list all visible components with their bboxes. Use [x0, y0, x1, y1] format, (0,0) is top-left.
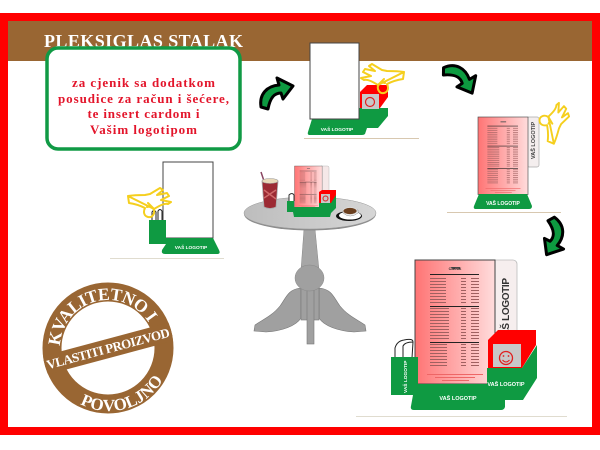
shelf line	[356, 416, 567, 417]
base label: VAŠ LOGOTIP	[486, 199, 521, 207]
box pocket label: VAŠ LOGOTIP	[487, 380, 525, 388]
icon: hand	[361, 64, 404, 93]
box face with smiley	[362, 94, 379, 109]
icon: hand	[128, 188, 171, 217]
coffee cup on saucer	[336, 208, 362, 221]
base label: VAŠ LOGOTIP	[321, 125, 354, 133]
green base	[474, 194, 532, 209]
icon: hand	[534, 99, 572, 146]
stand: step one, empty panel	[110, 162, 224, 259]
glass of cola	[261, 172, 278, 208]
logo card behind menu: VAŠ LOGOTIP	[529, 121, 537, 159]
stamp band: VLASTITI PROIZVOD	[45, 325, 171, 372]
napkin roll	[395, 339, 413, 358]
stamp text: bottom: POVOLJNO	[80, 376, 161, 412]
brown header band	[8, 21, 592, 61]
column ball	[295, 265, 324, 291]
menu heading: CJENIK	[449, 267, 462, 271]
stand: step two, card insert	[304, 43, 419, 139]
napkin outline	[152, 210, 162, 220]
green holder	[149, 220, 166, 244]
box face with smiley	[493, 344, 521, 367]
stand: final assembled product	[356, 260, 567, 417]
empty stand panel	[310, 43, 359, 119]
table column	[301, 229, 319, 270]
callout: description box: Vašim logotipom	[90, 122, 197, 137]
empty stand panel	[163, 162, 213, 238]
title: PLEKSIGLAS STALAK	[44, 31, 243, 51]
shelf line	[304, 138, 419, 139]
callout: description box: za cjenik sa dodatkom	[72, 75, 215, 90]
miniature stand	[287, 166, 336, 217]
base label: VAŠ LOGOTIP	[439, 394, 477, 402]
table with drinks and stand	[244, 166, 376, 344]
callout: description box: posudice za račun i šećere,	[58, 91, 229, 106]
menu sheet	[478, 117, 528, 194]
shelf line	[110, 258, 224, 259]
arrow: step two to three	[442, 60, 480, 99]
logo card: VAŠ LOGOTIP	[499, 278, 512, 342]
napkin holder	[391, 357, 418, 395]
table top	[244, 197, 376, 230]
red card box	[488, 330, 536, 368]
shelf line	[447, 212, 561, 213]
callout: description box: te insert cardom i	[88, 106, 200, 121]
menu sheet	[415, 260, 495, 384]
arrow: step three to four	[530, 216, 575, 260]
green base	[308, 108, 388, 135]
base label: VAŠ LOGOTIP	[175, 243, 208, 251]
stand: step three, menu inserted	[447, 99, 572, 213]
holder label: VAŠ LOGOTIP	[401, 360, 409, 393]
stamp ring	[52, 292, 164, 404]
logo card	[488, 260, 517, 350]
stamp badge	[42, 282, 174, 414]
stamp text: top: KVALITETNO I	[48, 288, 158, 346]
arrow: step one to two	[261, 78, 293, 109]
green base with pockets	[411, 345, 537, 410]
green base	[162, 238, 220, 254]
table leg base	[254, 288, 366, 344]
red card box	[360, 85, 388, 108]
callout: description box	[47, 48, 240, 149]
